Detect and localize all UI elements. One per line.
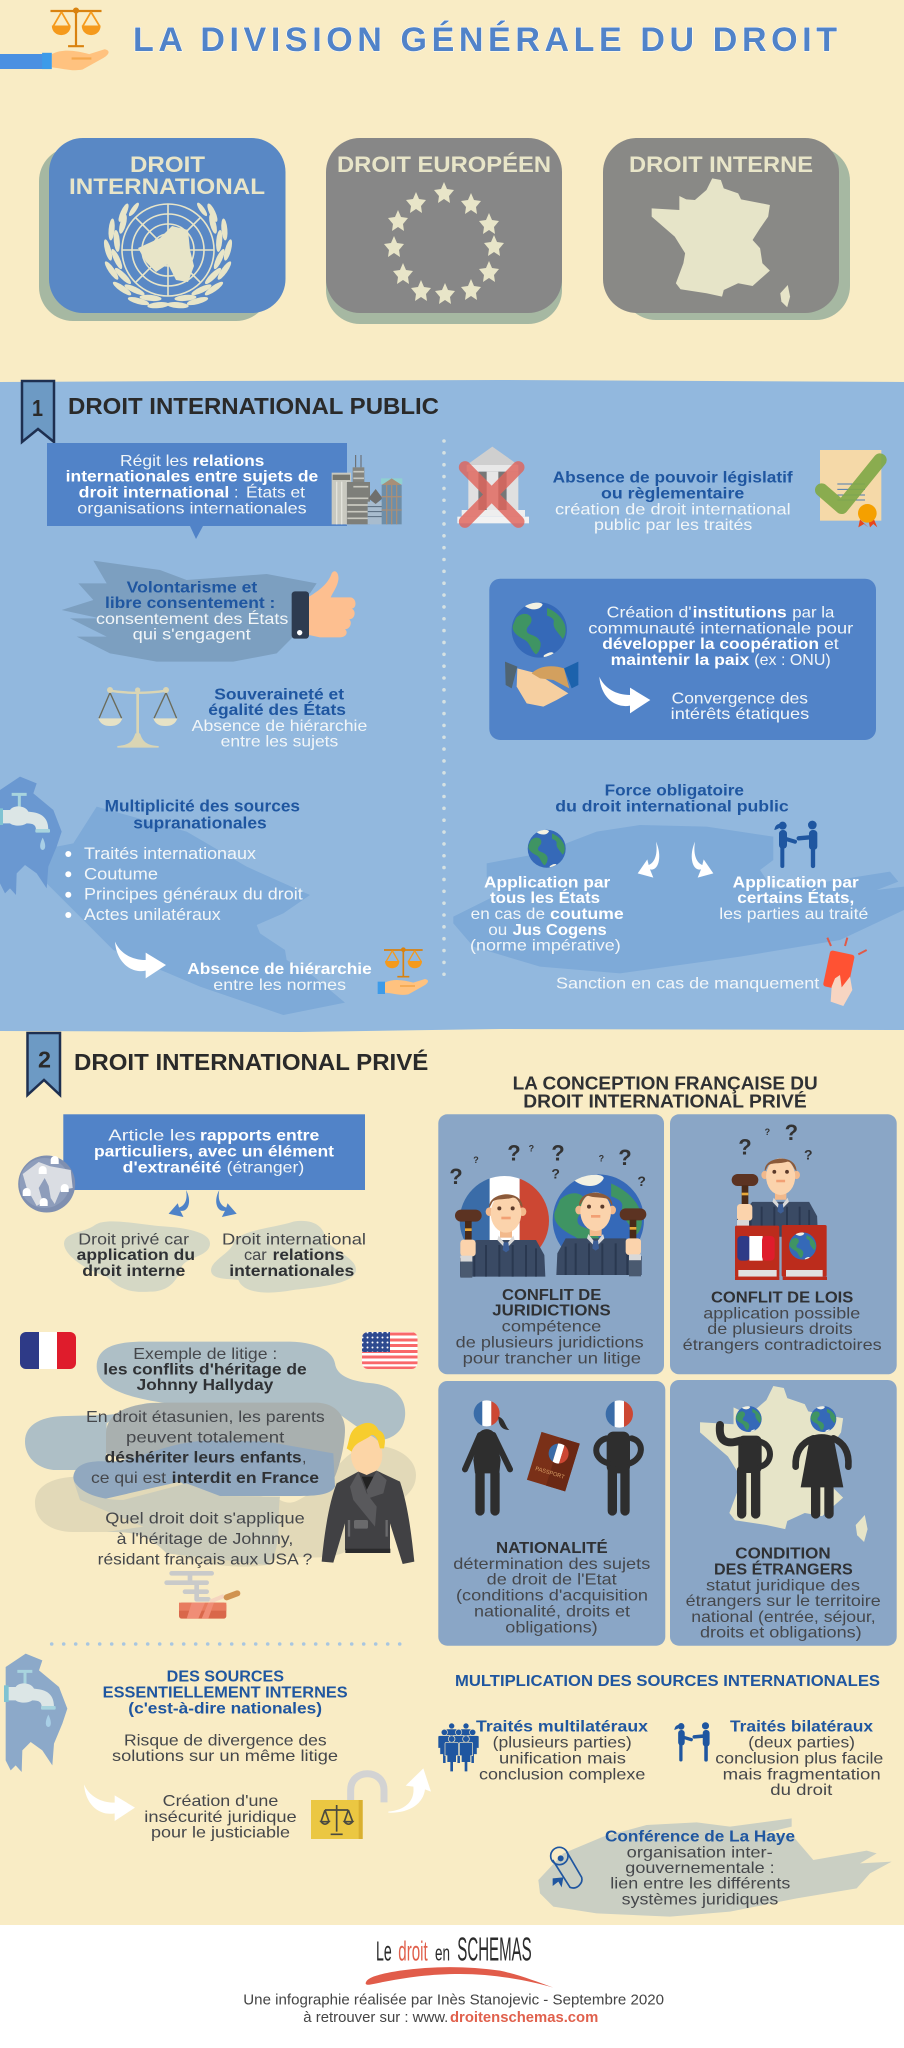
text block: souveraineté: Souveraineté et — [214, 686, 345, 703]
icon: network globe — [18, 1156, 75, 1212]
text block: absence de pouvoir: Absence de pouvoir législatif — [553, 470, 793, 487]
panel: conflit de juridictions: CONFLIT DE — [502, 1287, 602, 1304]
dotted separator — [442, 441, 446, 976]
heading: force obligatoire: du droit international public — [555, 799, 789, 816]
icon: two judges: ? — [507, 1141, 521, 1166]
heading: droit international public: DROIT INTERNATIONAL PUBLIC — [68, 393, 439, 419]
icon: UN emblem — [102, 201, 234, 309]
callout: rapports entre particuliers: (étranger) — [227, 1159, 304, 1176]
panel: création d'institutions: communauté internationale pour — [588, 620, 854, 637]
text block: sources internes: solutions sur un même litige — [112, 1748, 338, 1765]
text block: application par tous les états: ou — [488, 922, 507, 939]
panel: condition des étrangers: statut juridique des — [706, 1577, 860, 1594]
text block: absence de pouvoir: public par les traités — [594, 517, 752, 534]
callout: relations internationales: : — [234, 484, 238, 501]
text block: application par certains états: les parties au traité — [719, 906, 868, 923]
panel: footer — [0, 1925, 904, 2048]
text block: absence de hiérarchie: entre les normes — [213, 977, 346, 994]
text block: droit privé car — [64, 1221, 210, 1292]
icon: ashtray — [167, 1573, 237, 1619]
heading: force obligatoire — [555, 783, 789, 816]
icon: buildings — [332, 455, 402, 524]
icon: tap on blob — [4, 1654, 67, 1772]
panel: conflit de lois: application possible — [703, 1305, 860, 1322]
icon: scale and hand — [378, 947, 428, 995]
text block: traités bilatéraux: du droit — [770, 1782, 833, 1799]
arrow — [115, 942, 166, 978]
text block: absence de hiérarchie: Absence de hiérarchie — [187, 961, 372, 978]
text block: traités multilatéraux: Traités multilatéraux — [476, 1719, 648, 1736]
text block: Johnny Hallyday example: résidant français aux USA ? — [98, 1551, 312, 1568]
text block: Johnny Hallyday example: En droit étasunien, les parents — [86, 1409, 325, 1426]
text block: Johnny Hallyday example: ce qui est — [91, 1470, 167, 1487]
panel: conflit de lois: CONFLIT DE LOIS — [711, 1289, 854, 1306]
panel: création d'institutions: Création d' — [607, 604, 692, 621]
text block: application par tous les états: coutume — [550, 906, 624, 923]
brush stroke: La Haye — [538, 1818, 892, 1917]
text block: souveraineté: entre les sujets — [221, 734, 338, 751]
panel: nationalité: NATIONALITÉ — [496, 1538, 608, 1557]
callout: relations internationales: Régit les — [120, 453, 188, 470]
logo: le droit en schemas — [366, 1931, 553, 1988]
text block: insécurité juridique: Création d'une — [163, 1793, 278, 1810]
panel: section 1 background — [0, 380, 904, 1032]
heading: droit international privé: DROIT INTERNATIONAL PRIVÉ — [74, 1048, 428, 1075]
text block: souveraineté: Absence de hiérarchie — [192, 718, 367, 735]
arrows: droit privé / international — [169, 1190, 237, 1217]
panel: droit européen — [326, 138, 562, 324]
panel: conflit de lois: étrangers contradictoires — [683, 1337, 882, 1354]
text block: multiplicité des sources — [65, 798, 303, 924]
dotted separator — [52, 1642, 402, 1646]
brush stroke — [62, 561, 317, 662]
icon: two judges: ? — [473, 1155, 479, 1165]
panel: droit international: DROIT — [130, 152, 206, 177]
text block: traités multilatéraux: unification mais — [499, 1750, 626, 1767]
panel: création d'institutions: développer la coopération — [602, 636, 819, 653]
text block: application par tous les états: tous les États — [490, 888, 600, 907]
text block: application par certains états: certains États, — [737, 888, 854, 907]
panel: création d'institutions: maintenir la paix — [611, 652, 749, 669]
text block: conférence de La Haye: organisation inter- — [627, 1844, 773, 1861]
text block: application par tous les états: Application par — [484, 874, 610, 891]
callout: relations internationales: organisations internationales — [77, 500, 307, 517]
text block: droit privé car: Droit privé car — [78, 1231, 190, 1248]
text block: traités multilatéraux — [476, 1719, 648, 1783]
icon: crowd — [438, 1723, 479, 1772]
panel: création d'institutions: par la — [792, 604, 834, 621]
panel: condition des étrangers: CONDITION — [735, 1546, 831, 1563]
panel: conflit de juridictions: de plusieurs juridictions — [456, 1335, 644, 1352]
text block: Johnny Hallyday example: Exemple de litige : — [133, 1346, 277, 1363]
panel: condition des étrangers: DES ÉTRANGERS — [714, 1559, 853, 1578]
icon: France map with foreigners — [700, 1386, 868, 1542]
text block: absence de pouvoir: création de droit international — [555, 501, 791, 518]
icon: Johnny in leather jacket — [322, 1423, 414, 1564]
icon: open padlock with scale — [311, 1774, 384, 1839]
footer credits: Une infographie réalisée par Inès Stanojevic - Septembre 2020 — [243, 1992, 664, 2008]
icon: red card — [823, 938, 867, 1006]
text block: multiplicité des sources: Actes unilatéraux — [84, 906, 222, 924]
blobs: Johnny Hallyday example — [25, 1342, 416, 1567]
text block: volontarisme: libre consentement : — [105, 595, 275, 612]
callout: rapports entre particuliers: rapports entre — [200, 1128, 319, 1145]
text block: souveraineté: égalité des États — [208, 700, 346, 719]
text block: multiplicité des sources: supranationales — [133, 814, 267, 832]
text block: droit international car: Droit international — [222, 1231, 366, 1248]
ribbon: section 1: 1 — [32, 395, 43, 421]
icon: two people — [674, 1722, 710, 1760]
icon: two judges: ? — [599, 1154, 604, 1164]
footer credits: à retrouver sur : www. — [303, 2010, 448, 2026]
callout: rapports entre particuliers: particuliers, avec un élément — [94, 1143, 335, 1160]
text block: application par certains états: Application par — [733, 874, 859, 891]
text block: conférence de La Haye — [605, 1828, 795, 1909]
text block: droit international car — [211, 1221, 366, 1293]
callout: relations internationales — [47, 443, 347, 539]
panel: création d'institutions: et — [824, 636, 839, 653]
callout: rapports entre particuliers — [63, 1114, 365, 1190]
icon: judge with law books: ? — [738, 1134, 752, 1159]
icon: map of France — [652, 178, 790, 307]
panel: conflit de lois: de plusieurs droits — [707, 1321, 853, 1338]
text block: absence de hiérarchie — [187, 961, 372, 994]
icon: globe — [512, 602, 567, 658]
panel: condition des étrangers: étrangers sur le territoire — [686, 1593, 881, 1610]
text block: souveraineté — [192, 686, 367, 751]
text block: Johnny Hallyday example — [86, 1346, 325, 1568]
text block: Johnny Hallyday example: peuvent totalement — [126, 1429, 285, 1446]
icon: pale scale — [98, 687, 177, 748]
text block: absence de pouvoir: ou règlementaire — [601, 485, 744, 502]
logo: le droit en schemas: SCHEMAS — [457, 1931, 532, 1968]
text block: multiplicité des sources: Multiplicité des sources — [105, 798, 300, 816]
text block: traités bilatéraux — [715, 1719, 883, 1799]
text block: application par tous les états: (norme impérative) — [470, 938, 621, 955]
icon: two people — [774, 821, 817, 866]
heading: la conception française — [513, 1073, 818, 1111]
icon: thumb up — [292, 571, 355, 639]
arrow — [599, 677, 650, 713]
text block: sources internes — [103, 1669, 348, 1765]
text block: Johnny Hallyday example: interdit en France — [172, 1470, 319, 1487]
icon: two judges: ? — [637, 1173, 646, 1189]
icon: two judges: ? — [551, 1141, 565, 1166]
icon: judge with law books: ? — [804, 1146, 813, 1162]
panel: condition des étrangers — [670, 1380, 897, 1646]
text block: volontarisme: consentement des États — [96, 609, 288, 628]
text block: droit international car: relations — [273, 1247, 344, 1264]
icon: two judges: ? — [618, 1145, 632, 1170]
text block: conférence de La Haye: gouvernementale : — [625, 1860, 775, 1877]
arrow — [388, 1768, 431, 1813]
text block: traités bilatéraux: mais fragmentation — [723, 1766, 881, 1783]
text block: Johnny Hallyday example: déshériter leurs enfants — [105, 1450, 302, 1467]
panel: droit international: INTERNATIONAL — [69, 174, 265, 199]
icon: citizens with passport — [465, 1400, 641, 1511]
text block: Johnny Hallyday example: les conflits d'héritage de — [103, 1361, 307, 1378]
brush stroke: sources — [33, 807, 345, 1015]
icon: judge with law books: ? — [785, 1120, 798, 1145]
text block: multiplicité des sources: Coutume — [84, 865, 158, 883]
icon: crossed-out parliament — [457, 447, 529, 523]
icon: two judges: ? — [529, 1144, 534, 1154]
heading: la conception française: DROIT INTERNATIONAL PRIVÉ — [523, 1090, 807, 1111]
panel: création d'institutions: (ex : ONU) — [754, 652, 831, 669]
callout: rapports entre particuliers: d'extranéité — [123, 1159, 221, 1176]
text block: volontarisme: qui s'engagent — [133, 626, 251, 643]
swoosh — [366, 1967, 553, 1988]
text block: traités multilatéraux: conclusion complexe — [479, 1766, 645, 1783]
text block: conférence de La Haye: lien entre les différents — [610, 1876, 790, 1893]
text block: Johnny Hallyday example: Johnny Hallyday — [137, 1377, 273, 1394]
icon: two judges: ? — [551, 1165, 560, 1181]
panel: création d'institutions: intérêts étatiques — [671, 706, 809, 723]
panel: conflit de juridictions: JURIDICTIONS — [492, 1303, 611, 1320]
icon: two judges: ? — [449, 1164, 463, 1189]
text block: traités bilatéraux: Traités bilatéraux — [730, 1719, 873, 1736]
panel: conflit de juridictions: compétence — [502, 1319, 601, 1336]
text block: conférence de La Haye: systèmes juridiques — [622, 1892, 778, 1909]
text block: insécurité juridique — [144, 1793, 297, 1842]
text block: droit international car: car — [244, 1247, 267, 1264]
icon: US flag — [362, 1332, 418, 1369]
heading: force obligatoire: Force obligatoire — [605, 783, 744, 800]
text block: insécurité juridique: insécurité juridique — [144, 1809, 297, 1826]
icon: judge with law books: ? — [765, 1127, 770, 1137]
text block: traités bilatéraux: conclusion plus facile — [715, 1750, 883, 1767]
text block: sources internes: Risque de divergence des — [124, 1732, 327, 1749]
text block: sources internes: ESSENTIELLEMENT INTERNES — [103, 1684, 348, 1701]
panel: nationalité: nationalité, droits et — [474, 1603, 631, 1620]
text block: sources internes: (c'est-à-dire nationales) — [128, 1700, 322, 1717]
text block: application par tous les états — [470, 874, 624, 955]
panel: création d'institutions: institutions — [693, 604, 787, 621]
footer credits — [243, 1992, 664, 2026]
text block: volontarisme — [62, 561, 317, 662]
arrows: force obligatoire — [638, 842, 713, 878]
logo: le droit en schemas: Le — [376, 1936, 392, 1967]
heading: multiplication des sources: MULTIPLICATION DES SOURCES INTERNATIONALES — [455, 1673, 880, 1690]
panel: condition des étrangers: droits et obligations) — [700, 1625, 862, 1642]
panel: condition des étrangers: national (entrée, séjour, — [691, 1609, 876, 1626]
panel: nationalité: de droit de l'Etat — [487, 1572, 617, 1589]
title: LA DIVISION GÉNÉRALE DU DROIT — [133, 21, 837, 59]
text block: traités bilatéraux: (deux parties) — [748, 1735, 855, 1752]
panel: création d'institutions — [489, 579, 876, 740]
ribbon: section 1 — [22, 381, 54, 442]
text: sanction: Sanction en cas de manquement — [556, 975, 820, 992]
footer credits: droitenschemas.com — [450, 2010, 598, 2026]
text block: multiplicité des sources: Principes généraux du droit — [84, 886, 303, 904]
logo: le droit en schemas: en — [435, 1941, 450, 1966]
icon: EU stars — [384, 182, 504, 304]
text block: application par tous les états: Jus Cogens — [513, 922, 607, 939]
text block: application par tous les états: en cas de — [471, 906, 545, 923]
icon: handshake — [505, 662, 578, 707]
logo: le droit en schemas: droit — [398, 1936, 428, 1967]
text block: Johnny Hallyday example: , — [302, 1450, 306, 1467]
text block: absence de pouvoir — [553, 470, 793, 534]
text block: insécurité juridique: pour le justiciable — [151, 1825, 290, 1842]
panel: création d'institutions: Convergence des — [672, 690, 808, 707]
icon: scroll — [551, 1847, 582, 1888]
text block: Johnny Hallyday example: à l'héritage de Johnny, — [117, 1531, 293, 1548]
text block: droit privé car: application du — [77, 1247, 195, 1264]
panel: conflit de lois — [670, 1114, 897, 1374]
icon: French flag — [20, 1332, 76, 1369]
ribbon: section 2: 2 — [38, 1047, 51, 1073]
text block: volontarisme: Volontarisme et — [127, 579, 258, 596]
brush stroke: force obligatoire — [453, 825, 904, 973]
callout: relations internationales: États et — [246, 482, 306, 501]
text block: sources internes: DES SOURCES — [167, 1669, 284, 1686]
callout: relations internationales: relations — [193, 453, 264, 470]
text block: application par certains états — [719, 874, 868, 923]
text block: multiplicité des sources: Traités internationaux — [84, 845, 257, 863]
callout: relations internationales: droit international — [79, 484, 229, 501]
panel: droit interne — [603, 138, 850, 320]
panel: nationalité — [438, 1381, 665, 1646]
icon: tap — [0, 777, 62, 895]
panel: droit international — [39, 138, 286, 321]
icon: scale held in hand — [0, 7, 109, 70]
panel: nationalité: (conditions d'acquisition — [456, 1588, 648, 1605]
callout: rapports entre particuliers: Article les — [108, 1128, 196, 1145]
panel: droit européen: DROIT EUROPÉEN — [337, 152, 551, 177]
heading: la conception française: LA CONCEPTION FRANÇAISE DU — [513, 1073, 818, 1093]
icon: judge with law books — [732, 1120, 827, 1280]
panel: droit interne: DROIT INTERNE — [629, 152, 813, 177]
text block: Johnny Hallyday example: Quel droit doit s'applique — [105, 1511, 305, 1528]
arrow — [84, 1784, 135, 1821]
icon: globe — [528, 830, 566, 868]
panel: conflit de juridictions — [438, 1114, 664, 1374]
text block: droit international car: internationales — [229, 1263, 354, 1280]
panel: nationalité: obligations) — [505, 1619, 598, 1636]
text block: traités multilatéraux: (plusieurs parties) — [493, 1735, 632, 1752]
panel: conflit de juridictions: pour trancher un litige — [463, 1350, 641, 1367]
icon: two judges — [449, 1141, 646, 1278]
icon: certificate — [820, 450, 881, 527]
ribbon: section 2 — [28, 1033, 60, 1095]
text block: conférence de La Haye: Conférence de La Haye — [605, 1828, 795, 1845]
text block: droit privé car: droit interne — [82, 1263, 185, 1280]
icon: citizens with passport: PASSPORT — [534, 1466, 566, 1481]
callout: relations internationales: internationales entre sujets de — [66, 469, 318, 486]
panel: nationalité: détermination des sujets — [453, 1556, 650, 1573]
